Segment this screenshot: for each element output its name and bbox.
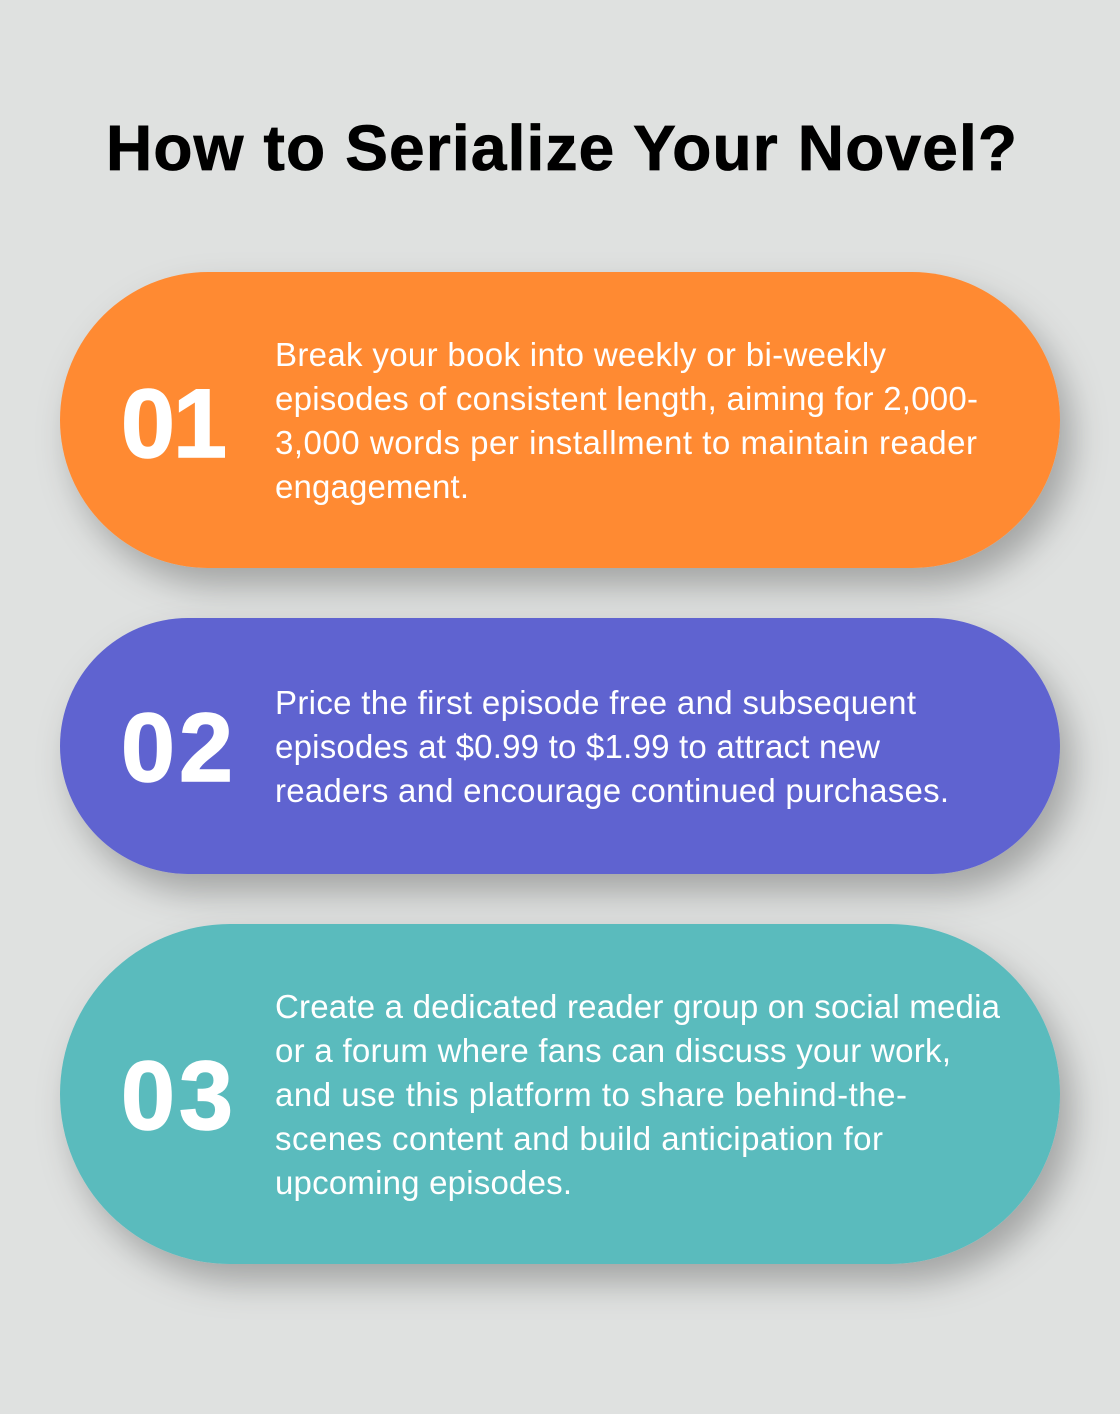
step 01 text: Break your book into weekly or bi-weekly bbox=[275, 336, 886, 373]
step 03 text: scenes content and build anticipation for bbox=[275, 1120, 883, 1157]
step 03 text: or a forum where fans can discuss your work, bbox=[275, 1032, 951, 1069]
panel: step 01 bbox=[60, 272, 1060, 568]
step 02 text bbox=[275, 684, 949, 809]
step 02 text: episodes at $0.99 to $1.99 to attract new bbox=[275, 728, 880, 765]
step 03 text: upcoming episodes. bbox=[275, 1164, 572, 1201]
step 01 text: episodes of consistent length, aiming for 2,000- bbox=[275, 380, 978, 417]
step 01 text: 3,000 words per installment to maintain reader bbox=[275, 424, 977, 461]
number 02: 02 bbox=[121, 693, 233, 802]
step 01 text bbox=[275, 336, 978, 505]
step 02 text: readers and encourage continued purchases. bbox=[275, 772, 949, 809]
step 03 text: Create a dedicated reader group on social media bbox=[275, 988, 1001, 1025]
step 03 text: and use this platform to share behind-the- bbox=[275, 1076, 907, 1113]
teal pill background bbox=[60, 924, 1060, 1264]
number 03: 03 bbox=[121, 1041, 233, 1150]
step 01 text: engagement. bbox=[275, 468, 469, 505]
panel: step 02 bbox=[60, 618, 1060, 874]
step 02 text: Price the first episode free and subsequent bbox=[275, 684, 916, 721]
title: How to Serialize Your Novel? bbox=[106, 112, 1017, 184]
orange pill background bbox=[60, 272, 1060, 568]
panel: step 03 bbox=[60, 924, 1060, 1264]
purple pill background bbox=[60, 618, 1060, 874]
number 01: 01 bbox=[121, 369, 227, 478]
step 03 text bbox=[275, 988, 1001, 1201]
